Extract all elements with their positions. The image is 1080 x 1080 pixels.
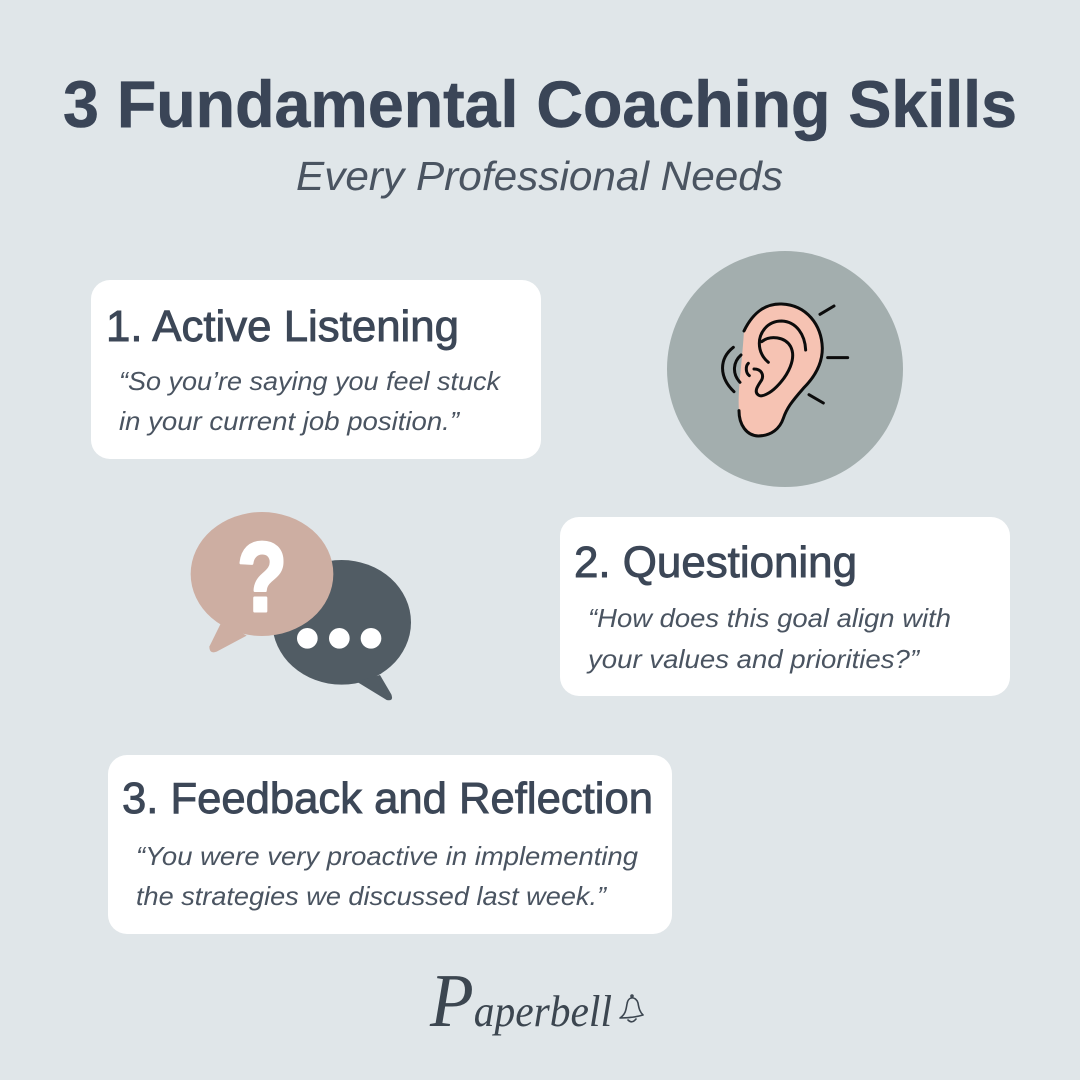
heading: active listening: 1. Active Listening <box>106 302 459 351</box>
quote: questioning <box>586 603 951 674</box>
logo: Paperbell <box>429 959 643 1043</box>
quote: feedback and reflection <box>136 841 639 911</box>
quote: questioning: “How does this goal align with <box>588 603 951 633</box>
icon: bell <box>620 995 643 1022</box>
panel: active listening <box>91 280 541 459</box>
quote: questioning: your values and priorities?” <box>586 644 920 674</box>
quote: feedback and reflection: “You were very proactive in implementing <box>136 841 639 871</box>
panel: feedback and reflection <box>108 755 672 934</box>
quote: active listening: in your current job position.” <box>119 406 460 436</box>
quote: active listening: “So you’re saying you feel stuck <box>119 366 502 396</box>
dark speech bubble <box>272 560 411 700</box>
tan speech bubble <box>191 512 333 652</box>
quote: feedback and reflection: the strategies we discussed last week.” <box>136 881 607 911</box>
question mark: ? <box>237 522 287 632</box>
title: 3 Fundamental Coaching Skills <box>63 67 1017 141</box>
heading: questioning: 2. Questioning <box>574 538 857 587</box>
panel: questioning <box>560 517 1010 696</box>
quote: active listening <box>119 366 502 436</box>
logo wordmark: Paperbell <box>429 959 612 1043</box>
icon: speech bubbles <box>191 512 411 700</box>
icon: ear <box>667 251 903 487</box>
heading: feedback and reflection: 3. Feedback and Reflection <box>122 774 653 823</box>
subtitle: Every Professional Needs <box>296 153 783 199</box>
